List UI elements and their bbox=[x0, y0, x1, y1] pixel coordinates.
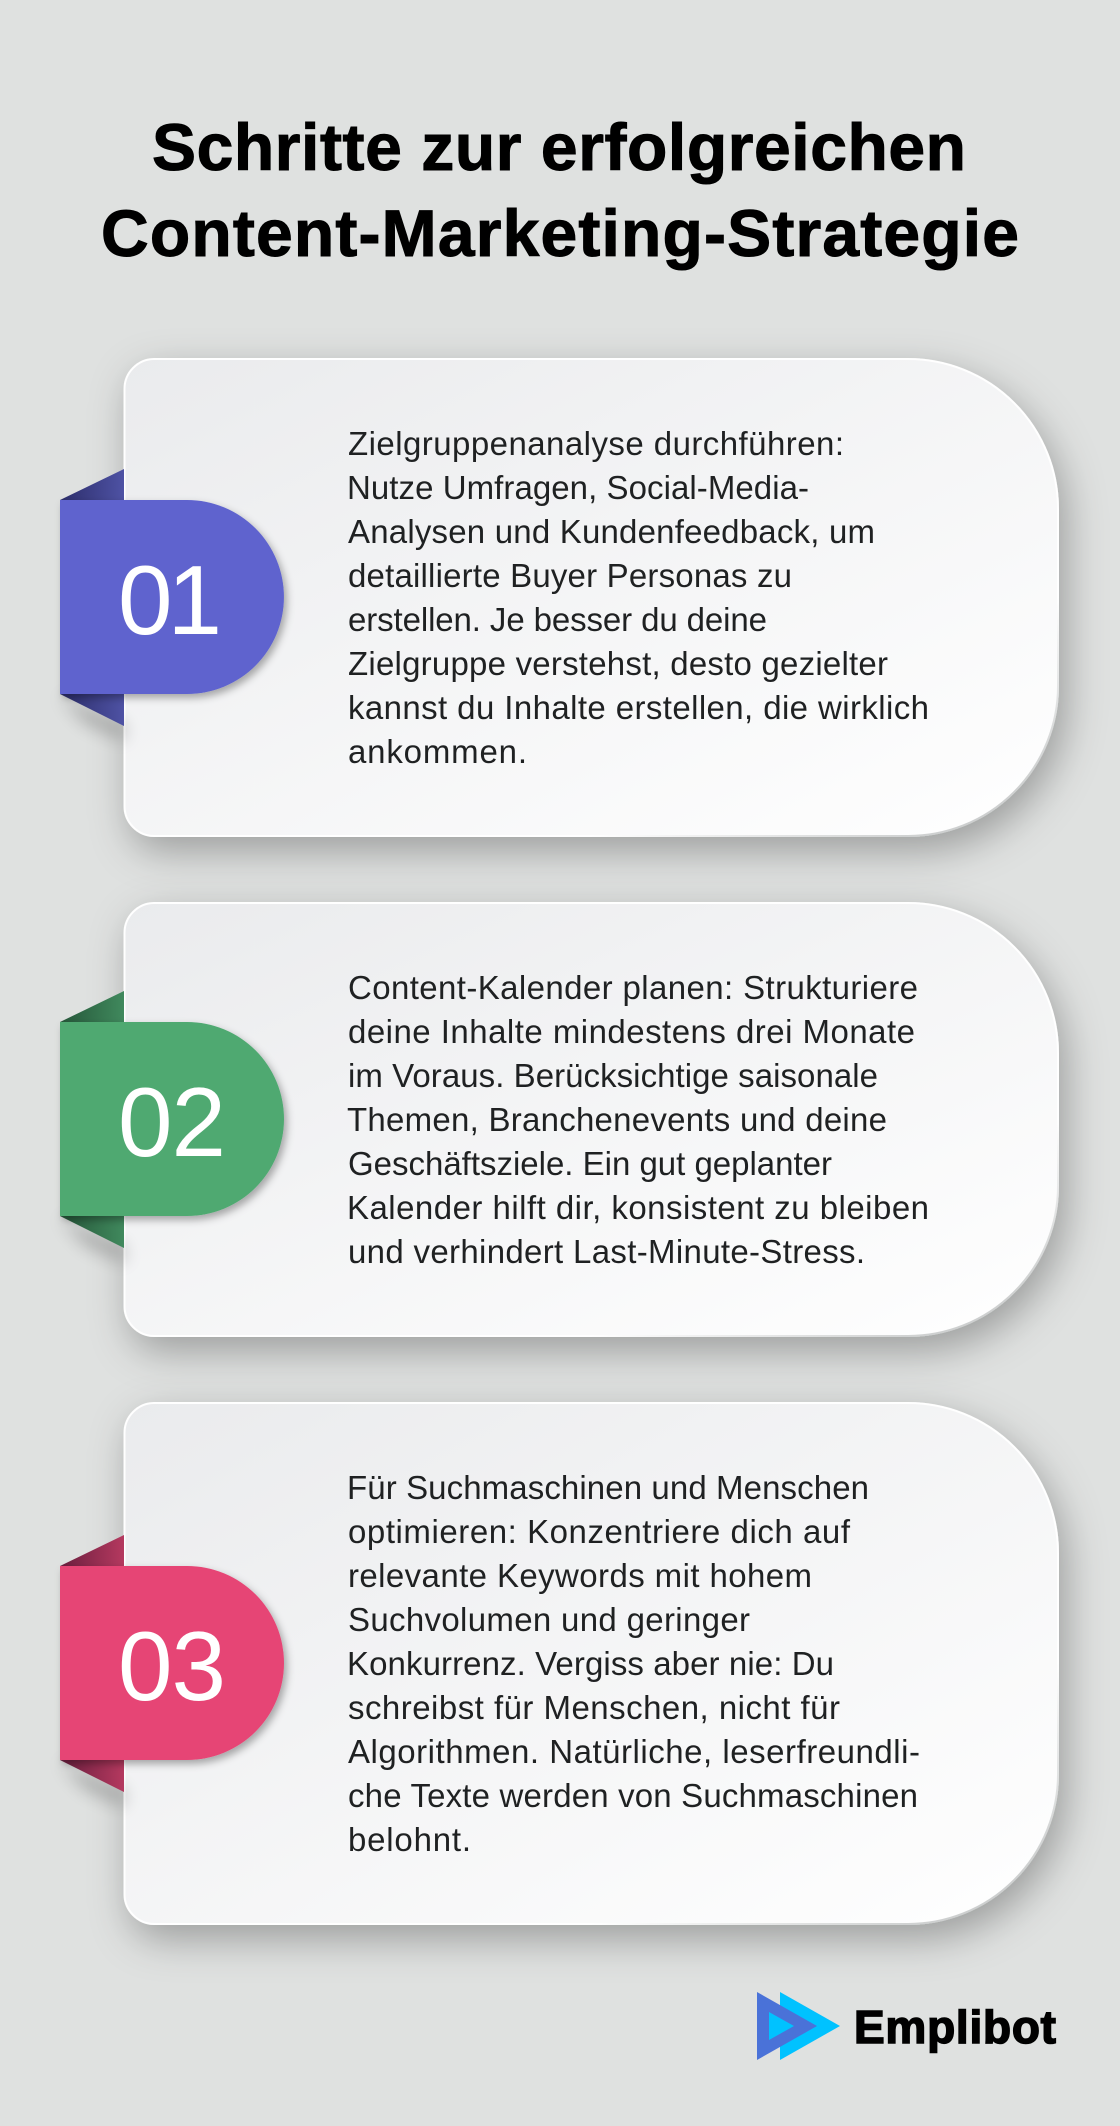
title: Schritte zur erfolgreichen bbox=[152, 110, 966, 184]
icon: double play triangles bbox=[757, 1992, 840, 2060]
number 01: 01 bbox=[118, 545, 222, 655]
logo: Emplibot bbox=[757, 1992, 1056, 2060]
body text 3 bbox=[347, 1469, 920, 1858]
ribbon fold bottom 3 bbox=[60, 1760, 124, 1792]
body text 3: Algorithmen. Natürliche, leserfreundli- bbox=[348, 1733, 920, 1770]
ribbon fold top 3 bbox=[60, 1535, 124, 1566]
body text 3: Für Suchmaschinen und Menschen bbox=[347, 1469, 869, 1506]
body text 2: Kalender hilft dir, konsistent zu bleiben bbox=[347, 1189, 929, 1226]
body text 1: Zielgruppe verstehst, desto gezielter bbox=[348, 645, 888, 682]
title bbox=[101, 110, 1019, 270]
card background 2 bbox=[124, 903, 1058, 1336]
number badge 3 bbox=[60, 1566, 284, 1760]
body text 3: belohnt. bbox=[348, 1821, 471, 1858]
number badge 2 bbox=[60, 1022, 284, 1216]
body text 2: Themen, Branchenevents und deine bbox=[347, 1101, 887, 1138]
card background 3 bbox=[124, 1403, 1058, 1924]
panel: step 2 bbox=[60, 903, 1058, 1336]
body text 2: Geschäftsziele. Ein gut geplanter bbox=[348, 1145, 832, 1182]
ribbon fold top 2 bbox=[60, 991, 124, 1022]
panel: step 3 bbox=[60, 1403, 1058, 1924]
wordmark: Emplibot bbox=[854, 2001, 1056, 2053]
body text 2: und verhindert Last-Minute-Stress. bbox=[348, 1233, 865, 1270]
body text 1: Zielgruppenanalyse durchführen: bbox=[348, 425, 844, 462]
body text 2: im Voraus. Berücksichtige saisonale bbox=[348, 1057, 878, 1094]
body text 3: Suchvolumen und geringer bbox=[348, 1601, 750, 1638]
number 02: 02 bbox=[118, 1067, 226, 1177]
body text 1: erstellen. Je besser du deine bbox=[348, 601, 767, 638]
panel: step 1 bbox=[60, 359, 1058, 836]
ribbon fold shadow 2 bbox=[60, 1216, 124, 1262]
body text 1: Analysen und Kundenfeedback, um bbox=[348, 513, 875, 550]
body text 3: relevante Keywords mit hohem bbox=[348, 1557, 812, 1594]
ribbon fold bottom 1 bbox=[60, 694, 124, 726]
body text 3: Konkurrenz. Vergiss aber nie: Du bbox=[347, 1645, 834, 1682]
ribbon fold shadow 1 bbox=[60, 694, 124, 740]
body text 1: ankommen. bbox=[348, 733, 527, 770]
body text 2: Content-Kalender planen: Strukturiere bbox=[348, 969, 918, 1006]
body text 3: optimieren: Konzentriere dich auf bbox=[348, 1513, 851, 1550]
body text 1: kannst du Inhalte erstellen, die wirklich bbox=[348, 689, 929, 726]
body text 2: deine Inhalte mindestens drei Monate bbox=[348, 1013, 915, 1050]
number 03: 03 bbox=[118, 1611, 226, 1721]
ribbon fold shadow 3 bbox=[60, 1760, 124, 1806]
body text 3: che Texte werden von Suchmaschinen bbox=[348, 1777, 918, 1814]
card background 1 bbox=[124, 359, 1058, 836]
body text 1 bbox=[347, 425, 929, 770]
title: Content-Marketing-Strategie bbox=[101, 196, 1019, 270]
ribbon fold bottom 2 bbox=[60, 1216, 124, 1248]
body text 1: Nutze Umfragen, Social-Media- bbox=[347, 469, 809, 506]
body text 1: detaillierte Buyer Personas zu bbox=[348, 557, 792, 594]
number badge 1 bbox=[60, 500, 284, 694]
body text 3: schreibst für Menschen, nicht für bbox=[348, 1689, 840, 1726]
ribbon fold top 1 bbox=[60, 469, 124, 500]
body text 2 bbox=[347, 969, 929, 1270]
